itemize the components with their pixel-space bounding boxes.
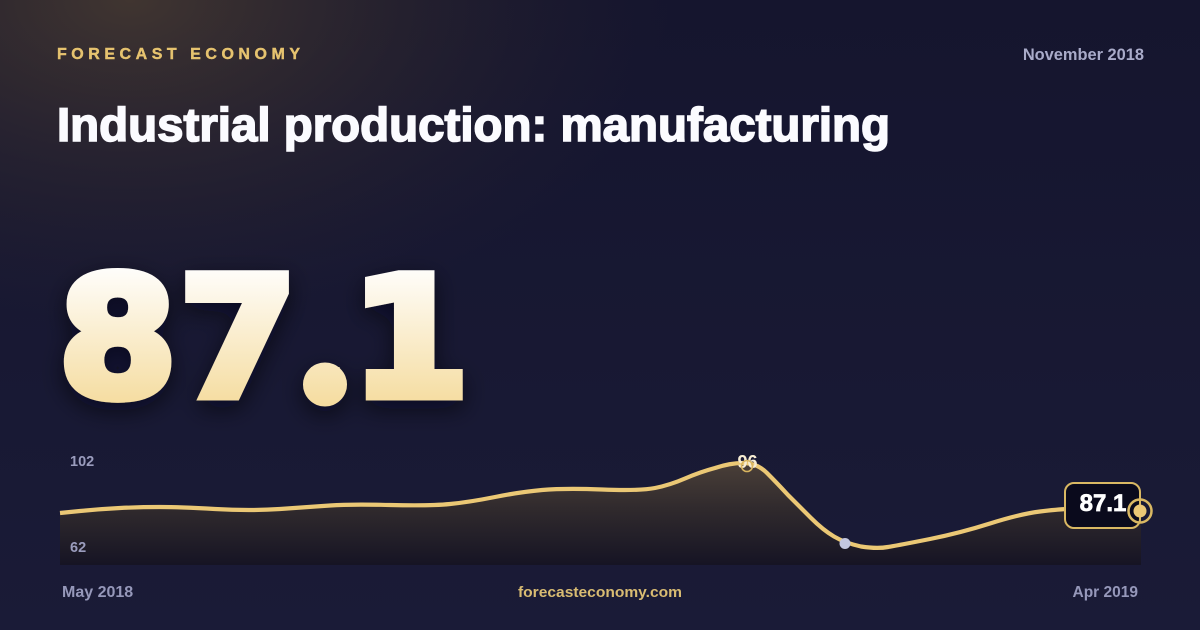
chart area fill — [60, 463, 1141, 565]
date: November 2018 — [1023, 46, 1144, 64]
axis label: max: 102 — [70, 454, 94, 470]
start date: May 2018 — [62, 584, 133, 601]
title: Industrial production: manufacturing — [57, 98, 890, 151]
line chart — [60, 452, 1152, 565]
current value marker — [1128, 500, 1152, 522]
current value callout — [1065, 483, 1140, 528]
website: forecasteconomy.com — [518, 584, 682, 601]
big value: 87.1 — [59, 243, 469, 435]
peak marker — [742, 460, 752, 472]
chart line — [60, 463, 1070, 548]
low marker — [840, 538, 850, 549]
current value callout: 87.1 — [1080, 490, 1126, 517]
peak label: 96 — [737, 452, 758, 472]
axis label: min: 62 — [70, 540, 86, 556]
end date: Apr 2019 — [1073, 584, 1138, 601]
brand label: FORECAST ECONOMY — [57, 46, 300, 63]
